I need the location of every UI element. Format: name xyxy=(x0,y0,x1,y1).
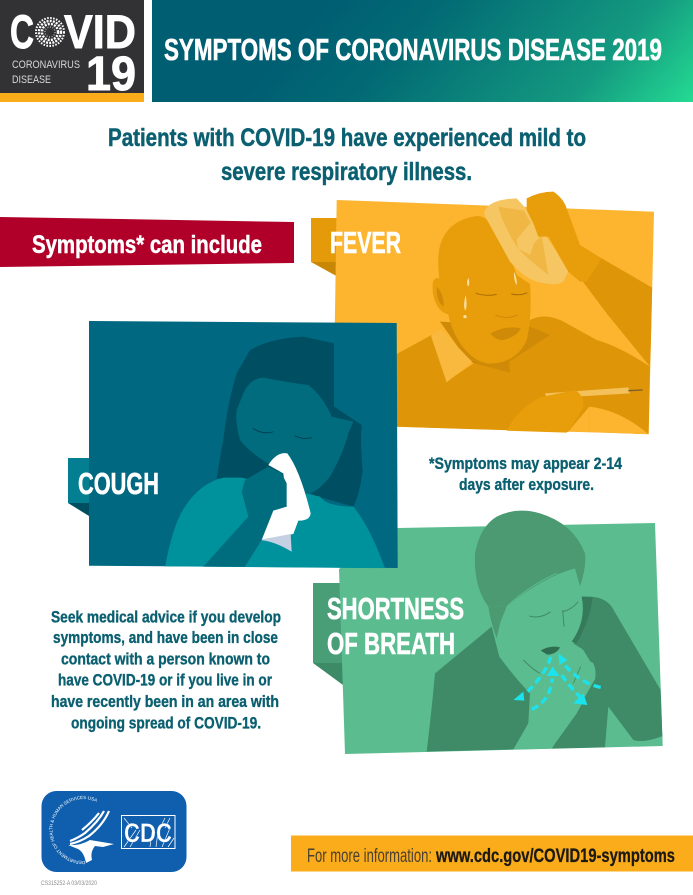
face lines xyxy=(507,573,578,673)
intro heading xyxy=(108,124,586,186)
breath arrows xyxy=(527,657,601,709)
medical advice text: Seek medical advice if you develop xyxy=(51,608,281,626)
hand on towel xyxy=(527,192,602,282)
medical advice text: ongoing spread of COVID-19. xyxy=(71,714,261,732)
logo number: 19: 19 xyxy=(86,48,136,101)
sweat drops xyxy=(463,272,517,318)
intro heading: severe respiratory illness. xyxy=(221,158,472,186)
medical advice text: have COVID-19 or if you live in or xyxy=(58,672,272,690)
tissue xyxy=(259,453,311,540)
cough label: COUGH xyxy=(78,466,159,501)
symptoms footnote xyxy=(429,455,623,494)
panel: cough xyxy=(68,321,398,568)
red banner: Symptoms can include: Symptoms* can include xyxy=(32,231,262,259)
hand and arm xyxy=(203,467,287,567)
footer bar: more information xyxy=(291,836,693,872)
medical advice text xyxy=(51,608,281,732)
panel: shortness of breath xyxy=(313,511,663,754)
breath label: SHORTNESS xyxy=(327,591,464,626)
red banner: Symptoms can include xyxy=(0,217,294,267)
logo word: COVID: VID xyxy=(64,5,136,58)
header banner xyxy=(152,0,693,102)
logo caption: CORONAVIRUS xyxy=(12,59,80,71)
intro heading: Patients with COVID-19 have experienced mild to xyxy=(108,124,586,152)
closed eyes xyxy=(253,428,312,438)
hand with thermometer xyxy=(507,390,584,433)
logo caption: DISEASE xyxy=(12,74,51,86)
cough ribbon xyxy=(68,458,94,516)
panel: fever xyxy=(311,192,654,434)
thermometer xyxy=(545,387,630,398)
header logo: COVID-19 Coronavirus Disease xyxy=(0,0,144,102)
towel xyxy=(484,198,568,284)
CDC logo: CDC xyxy=(124,818,172,848)
fever ribbon xyxy=(311,218,340,278)
publication code: CS315252-A 03/03/2020 xyxy=(41,880,97,887)
logo caption xyxy=(12,59,80,86)
medical advice text: contact with a person known to xyxy=(61,650,270,668)
symptoms footnote: *Symptoms may appear 2-14 xyxy=(429,455,623,473)
face lines xyxy=(476,293,527,317)
medical advice text: symptoms, and have been in close xyxy=(53,629,278,647)
HHS seal: DEPARTMENT OF HEALTH & HUMAN SERVICES·USA xyxy=(49,796,96,864)
footer bar: more information: For more information: xyxy=(307,846,432,867)
logo word: COVID: C xyxy=(10,5,34,58)
fever label: FEVER xyxy=(330,225,401,260)
breath ribbon xyxy=(313,583,345,685)
breath label xyxy=(327,591,464,661)
logo word: COVID xyxy=(10,5,136,58)
illustration: man with fever xyxy=(397,192,653,434)
hand fingers xyxy=(514,647,596,749)
symptoms footnote: days after exposure. xyxy=(459,476,594,494)
illustration: woman short of breath xyxy=(427,511,663,752)
logos: HHS and CDC xyxy=(42,791,186,872)
illustration: woman coughing xyxy=(165,337,385,568)
medical advice text: have recently been in an area with xyxy=(51,693,279,711)
breath label: OF BREATH xyxy=(327,626,455,661)
